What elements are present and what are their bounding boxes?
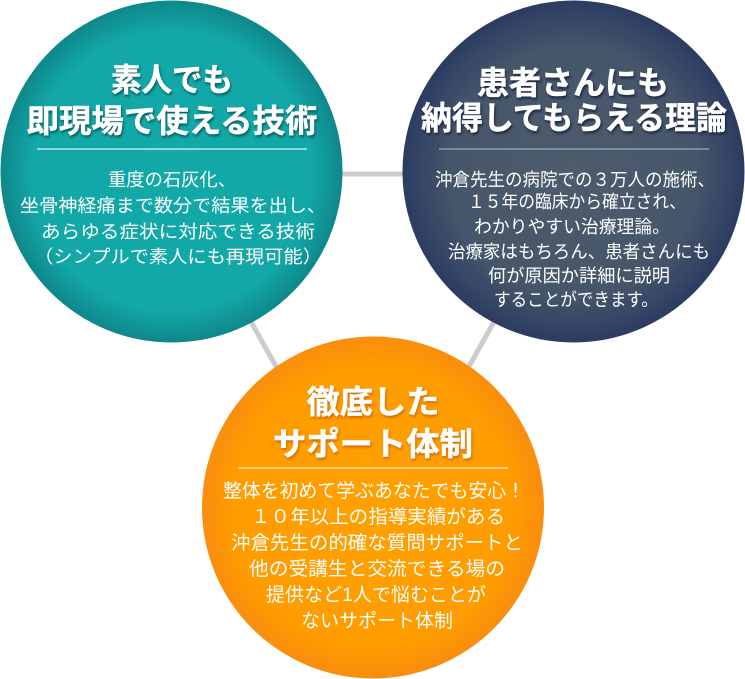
heading: support: サポート体制 [273,426,473,462]
body text: theory: 何が原因か詳細に説明 [488,266,670,286]
panel: theory (navy circle) [402,0,744,342]
heading: support [273,384,473,462]
heading: technique: 即現場で使える技術 [26,103,318,139]
body text: theory: することができます。 [494,290,658,310]
connector lines [250,174,495,370]
panel: technique (teal circle) [0,0,342,342]
body text: theory: １５年の臨床から確立され、 [468,192,686,212]
body text: technique: （シンプルで素人にも再現可能） [34,247,322,267]
heading: theory: 納得してもらえる理論 [421,100,727,136]
heading: technique [26,62,318,139]
body text: support: 整体を初めて学ぶあなたでも安心！ [223,480,525,502]
body text: theory: 治療家はもちろん、患者さんにも [448,242,710,262]
body text: theory: 沖倉先生の病院での３万人の施術、 [435,170,715,190]
heading: theory: 患者さんにも [477,65,669,101]
body text: support: 提供など1人で悩むことが [266,584,486,606]
body text: support [223,480,525,632]
body text: technique: 坐骨神経痛まで数分で結果を出し、 [20,196,326,216]
body text: support: ないサポート体制 [301,610,453,632]
body text: theory [435,170,715,310]
body text: technique [20,170,326,267]
heading: technique: 素人でも [111,62,233,98]
body text: theory: わかりやすい治療理論。 [474,217,670,237]
body text: support: 他の受講生と交流できる場の [249,558,505,580]
heading: support: 徹底した [306,384,440,420]
panel: support (orange circle) [202,336,544,678]
body text: technique: 重度の石灰化、 [108,170,236,190]
body text: technique: あらゆる症状に対応できる技術 [41,222,315,242]
body text: support: 沖倉先生の的確な質問サポートと [231,532,523,554]
body text: support: １０年以上の指導実績がある [251,506,505,528]
heading: theory [421,65,727,136]
